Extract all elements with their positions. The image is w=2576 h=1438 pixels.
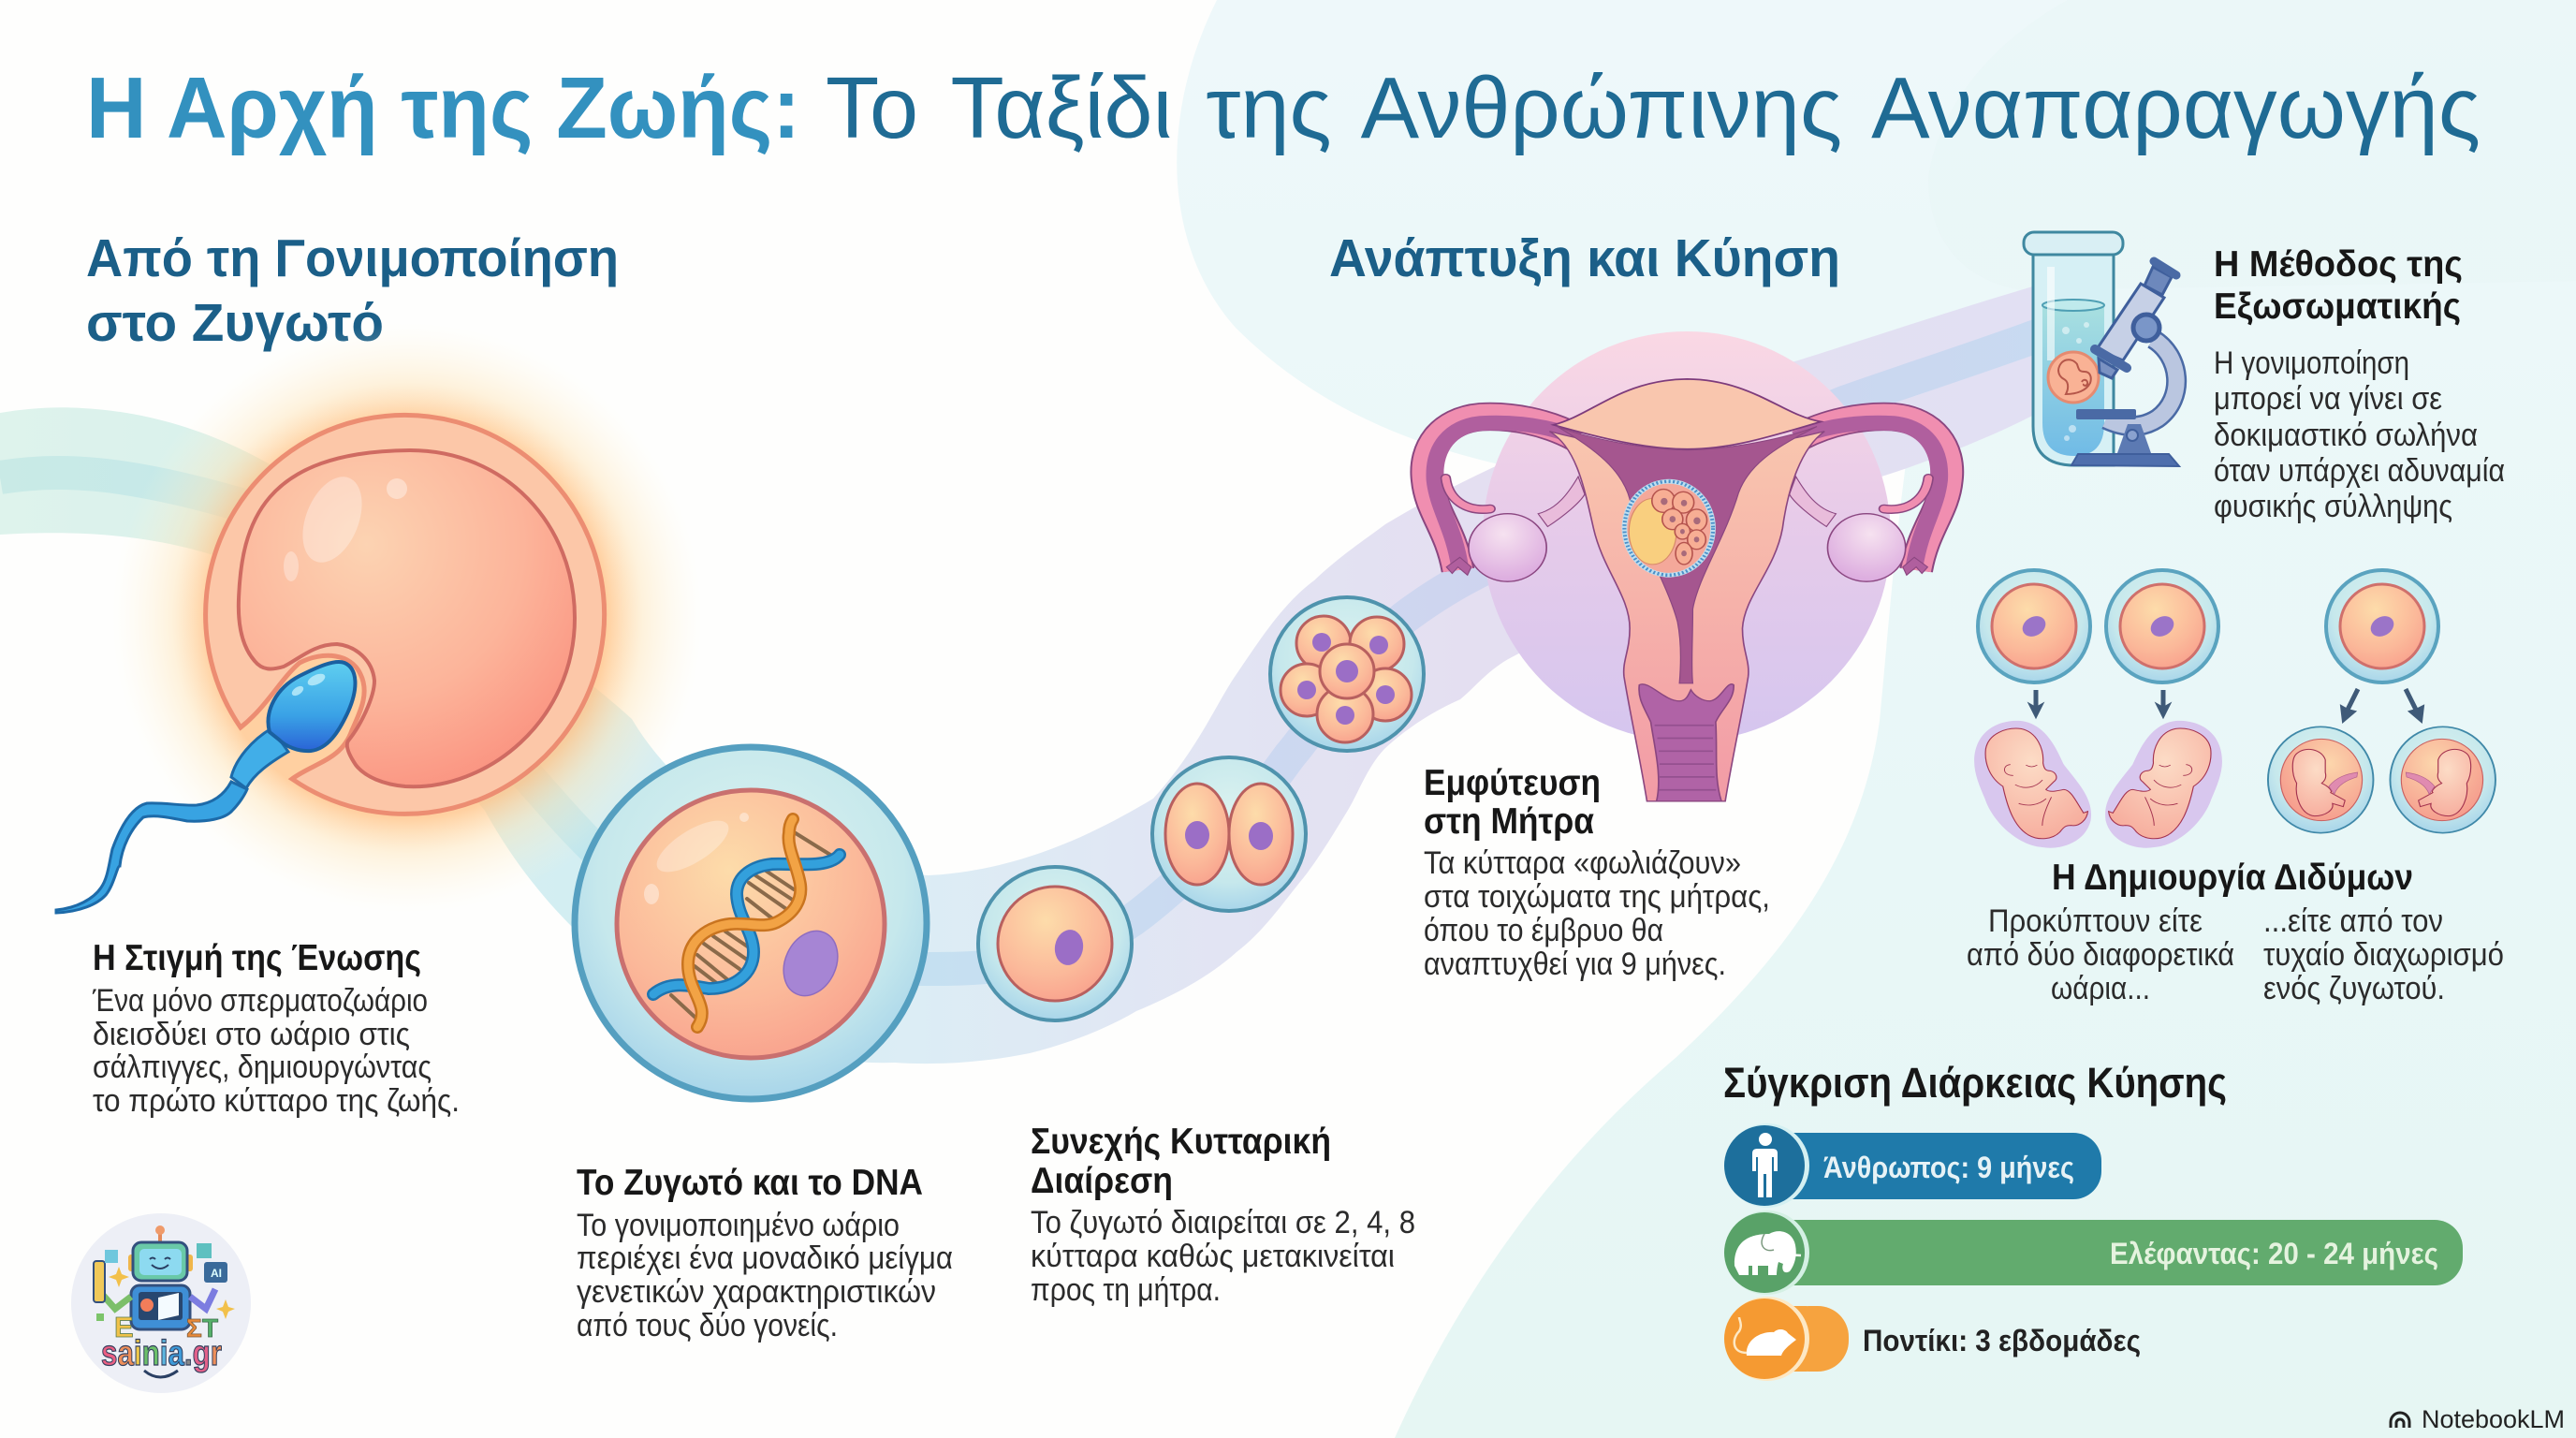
illustration: zygote with DNA: [575, 747, 927, 1099]
text: moment of union: [92, 938, 460, 1119]
illustration: identical twin fetuses: [2268, 726, 2496, 833]
sperm head: [269, 662, 355, 751]
text: creation of twins: τυχαίο διαχωρισμό: [2263, 937, 2504, 973]
heading: from fertilization to zygote: [86, 228, 619, 353]
DNA helix: [653, 819, 840, 1027]
nucleus: [773, 922, 848, 1005]
text: moment of union: Η Στιγμή της Ένωσης: [93, 938, 421, 978]
bar: human 9 months: [1724, 1123, 2101, 1208]
logo: sainia.gr robot: Τ: [202, 1313, 218, 1343]
illustration: egg with sperm: [56, 323, 702, 913]
text: IVF method: [2214, 244, 2505, 524]
flowing ribbon pathway: [0, 286, 2059, 1064]
bar: mouse 3 weeks: Ποντίκι: 3 εβδομάδες: [1863, 1324, 2141, 1357]
text: IVF method: Εξωσωματικής: [2214, 286, 2461, 327]
text: continuous cell division: Το ζυγωτό διαιρείται σε 2, 4, 8: [1031, 1205, 1415, 1240]
bar: mouse 3 weeks: [1724, 1297, 2141, 1381]
text: continuous cell division: Συνεχής Κυτταρική: [1031, 1122, 1331, 1162]
text: IVF method: Η Μέθοδος της: [2214, 244, 2463, 285]
icon: test tube and microscope: [2024, 232, 2179, 466]
text: implantation: όπου το έμβρυο θα: [1424, 913, 1663, 948]
text: zygote and DNA: [577, 1163, 953, 1343]
text: IVF method: μπορεί να γίνει σε: [2214, 381, 2442, 417]
illustration: two cells: [1152, 757, 1306, 911]
text: zygote and DNA: γενετικών χαρακτηριστικών: [577, 1274, 936, 1310]
bar: elephant 20-24 months: [1724, 1211, 2463, 1295]
text: implantation: στη Μήτρα: [1424, 801, 1594, 842]
implanted blastocyst: [1624, 481, 1713, 575]
logo: sainia.gr robot: [71, 1213, 251, 1393]
bar: human 9 months: Άνθρωπος: 9 μήνες: [1823, 1151, 2074, 1184]
pink circle behind uterus: [1483, 331, 1891, 741]
text: zygote and DNA: περιέχει ένα μοναδικό μείγμα: [577, 1240, 953, 1276]
text: implantation: Τα κύτταρα «φωλιάζουν»: [1424, 845, 1741, 881]
title: Η Αρχή της Ζωής:: [86, 59, 800, 156]
text: continuous cell division: προς τη μήτρα.: [1031, 1272, 1221, 1308]
text: IVF method: όταν υπάρχει αδυναμία: [2214, 453, 2505, 489]
text: creation of twins: [1967, 858, 2504, 1006]
background: secondary soft curve: [1928, 0, 2576, 290]
heading: from fertilization to zygote: στο Ζυγωτό: [86, 293, 384, 353]
logo: sainia.gr robot: Ε: [114, 1311, 134, 1343]
icon: mouse: [1734, 1317, 1796, 1356]
text: continuous cell division: κύτταρα καθώς μετακινείται: [1031, 1239, 1395, 1274]
text: IVF method: δοκιμαστικό σωλήνα: [2214, 418, 2478, 453]
text: moment of union: σάλπιγγες, δημιουργώντας: [93, 1049, 432, 1085]
microscope: [2071, 261, 2179, 466]
text: implantation: [1424, 763, 1770, 982]
text: zygote and DNA: Το γονιμοποιημένο ωάριο: [577, 1208, 900, 1243]
heading: from fertilization to zygote: Από τη Γονιμοποίηση: [86, 228, 619, 288]
watermark: NotebookLM: NotebookLM: [2422, 1405, 2565, 1433]
sperm midpiece: [231, 728, 288, 788]
text: creation of twins: Η Δημιουργία Διδύμων: [2052, 858, 2413, 898]
icon: elephant: [1734, 1231, 1801, 1275]
text: implantation: Εμφύτευση: [1424, 763, 1601, 803]
text: IVF method: Η γονιμοποίηση: [2214, 345, 2409, 381]
text: creation of twins: ωάρια...: [2051, 971, 2150, 1006]
text: moment of union: διεισδύει στο ωάριο στις: [93, 1017, 410, 1052]
text: creation of twins: Προκύπτουν είτε: [1988, 903, 2203, 939]
text: creation of twins: ενός ζυγωτού.: [2263, 971, 2445, 1006]
title: [86, 59, 2481, 156]
logo: sainia.gr robot: Σ: [186, 1313, 202, 1343]
text: continuous cell division: Διαίρεση: [1031, 1161, 1173, 1201]
icon: human: [1752, 1133, 1778, 1197]
text: moment of union: Ένα μόνο σπερματοζωάριο: [92, 983, 428, 1019]
embryo in tube: [2048, 352, 2099, 403]
illustration: fraternal twin fetuses: [1974, 721, 2222, 848]
heading: development and pregnancy: Ανάπτυξη και Κύηση: [1329, 228, 1840, 288]
title: Το Ταξίδι της Ανθρώπινης Αναπαραγωγής: [826, 59, 2481, 156]
sperm tail: [56, 782, 247, 913]
logo: sainia.gr robot: AI: [211, 1267, 222, 1280]
text: zygote and DNA: Το Ζυγωτό και το DNA: [577, 1163, 923, 1203]
text: implantation: αναπτυχθεί για 9 μήνες.: [1424, 946, 1726, 982]
bar: elephant 20-24 months: Ελέφαντας: 20 - 24 μήνες: [2110, 1237, 2438, 1270]
text: creation of twins: από δύο διαφορετικά: [1967, 937, 2234, 973]
heading: gestation comparison: Σύγκριση Διάρκειας Κύησης: [1723, 1059, 2227, 1107]
text: implantation: στα τοιχώματα της μήτρας,: [1424, 879, 1770, 915]
illustration: twin eggs: [1978, 570, 2438, 682]
illustration: multi-cell stage: [1270, 597, 1424, 751]
text: moment of union: το πρώτο κύτταρο της ζωής.: [93, 1083, 460, 1119]
arrows: eggs to fetuses: [2029, 689, 2423, 722]
text: zygote and DNA: από τους δύο γονείς.: [577, 1308, 838, 1343]
illustration: single cell: [978, 867, 1132, 1020]
illustration: uterus: [1427, 379, 1947, 801]
text: continuous cell division: [1031, 1122, 1415, 1308]
background: pale blue wave area: [1177, 0, 2576, 1438]
logo: sainia.gr robot: sainia.gr: [101, 1334, 222, 1373]
text: IVF method: φυσικής σύλληψης: [2214, 489, 2452, 524]
text: creation of twins: ...είτε από τον: [2263, 903, 2443, 939]
